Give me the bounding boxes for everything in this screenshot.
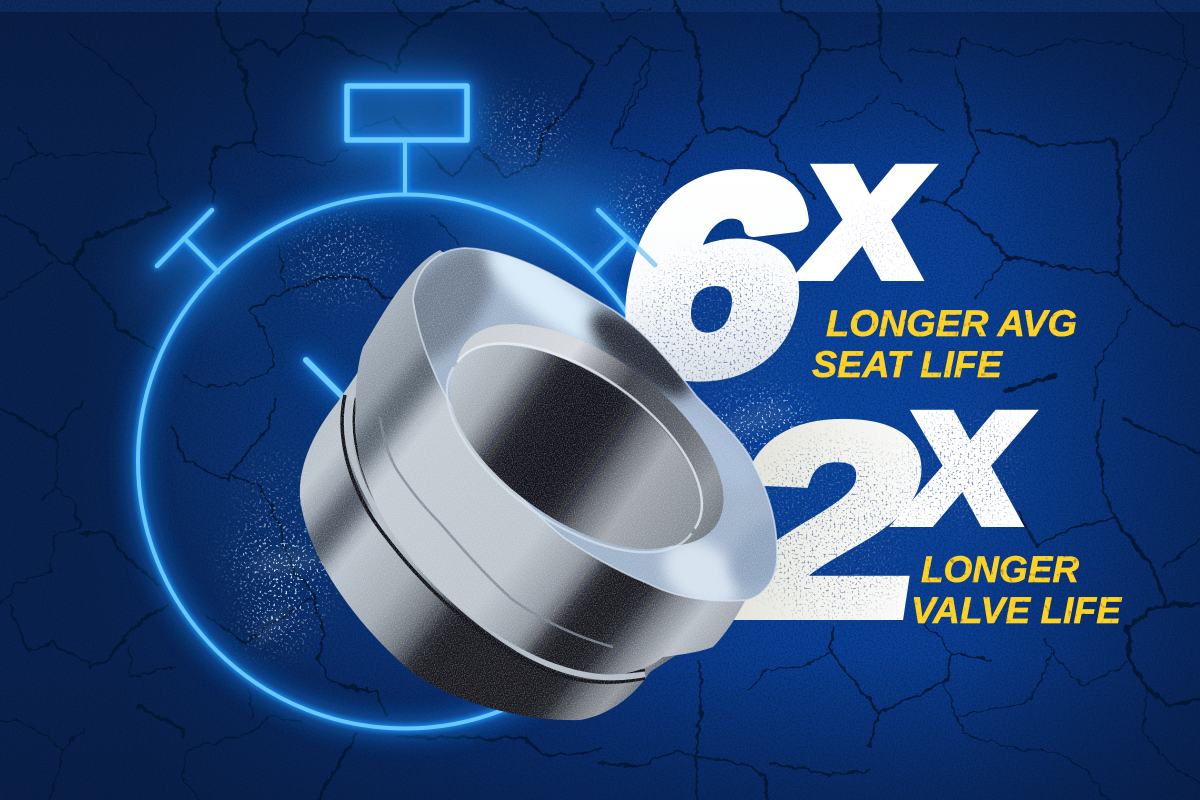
dust specks [209, 80, 830, 667]
crown stem [403, 140, 407, 194]
flange band [355, 250, 777, 674]
ambient neon glow behind stopwatch [135, 70, 630, 310]
front face conical rim [412, 247, 778, 602]
left side button [157, 210, 218, 272]
stopwatch neon outline [138, 86, 672, 728]
caption line 2: SEAT LIFE [812, 344, 1003, 385]
inner bore [446, 342, 704, 554]
numeral 2: 2 [712, 371, 945, 670]
multiplier x: X [898, 385, 1033, 552]
caption line 2: VALVE LIFE [911, 590, 1122, 631]
valve seat ring [300, 247, 778, 720]
right side button [593, 210, 655, 272]
multiplier x: X [798, 139, 933, 306]
speckle texture over numerals [622, 198, 1034, 630]
sealing groove [342, 395, 645, 682]
bore chamfer [419, 281, 761, 589]
stopwatch hand [306, 360, 345, 399]
dial circle [138, 194, 672, 728]
dust haze streak [248, 399, 795, 647]
big number 6X [599, 122, 933, 427]
right button tip overlapping the 6 [628, 238, 655, 265]
caption: longer avg seat life [812, 303, 1077, 385]
dust clouds [209, 80, 830, 667]
numeral 6: 6 [599, 122, 834, 427]
rim highlight edge [413, 248, 777, 601]
mid glow layer [138, 86, 672, 728]
lower body cylinder [300, 372, 676, 720]
caption line 1: LONGER AVG [826, 303, 1077, 344]
glow layer [138, 86, 672, 728]
caption line 1: LONGER [921, 549, 1079, 590]
crown button [347, 86, 467, 140]
caption: longer valve life [911, 549, 1122, 631]
flange ridge line [380, 417, 613, 647]
big number 2X [712, 371, 1033, 670]
